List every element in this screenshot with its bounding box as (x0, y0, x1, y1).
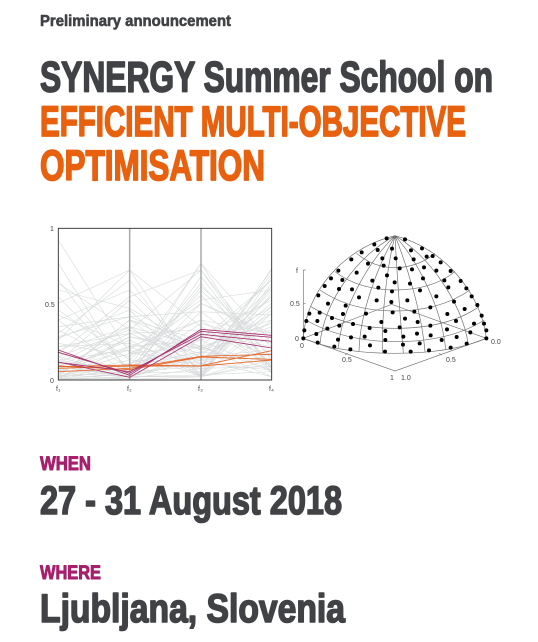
axes (130, 228, 201, 380)
chart: parallel coordinates: 0 (50, 378, 54, 385)
frame (58, 228, 272, 380)
title (40, 54, 493, 190)
date: 27 - 31 August 2018 (40, 479, 342, 523)
label: when: WHEN (40, 454, 91, 475)
chart: 3D sphere front: 0.5 (342, 357, 352, 364)
magenta lines (58, 329, 272, 377)
chart: 3D sphere front: 0.5 (446, 357, 456, 364)
text: preliminary announcement: Preliminary announcement (40, 13, 232, 30)
axes (303, 270, 486, 371)
grey solution lines (58, 240, 272, 379)
data points (301, 236, 488, 354)
chart: 3D sphere front: 1 (390, 375, 394, 382)
when section (40, 454, 342, 523)
chart: 3D sphere front: 0.0 (491, 339, 501, 346)
axis labels: 1 (50, 226, 54, 233)
label: where: WHERE (40, 563, 101, 584)
chart: 3D sphere front: 1.0 (401, 375, 411, 382)
sphere grid (303, 236, 486, 353)
chart: parallel coordinates: f₄ (269, 386, 274, 393)
chart: parallel coordinates: 0.5 (45, 302, 55, 309)
chart: 3D sphere front: 0 (295, 336, 299, 343)
chart: 3D sphere front: 0.5 (290, 301, 300, 308)
location: Ljubljana, Slovenia (40, 587, 346, 631)
axis labels: f (296, 268, 298, 275)
chart: parallel coordinates: f₁ (56, 386, 61, 393)
title line: OPTIMISATION: OPTIMISATION (40, 142, 265, 190)
orange lines (58, 351, 272, 372)
chart: parallel coordinates: f₃ (198, 386, 203, 393)
chart: parallel coordinates (45, 226, 274, 393)
chart: 3D sphere front: 0 (300, 343, 304, 350)
where section (40, 563, 346, 631)
chart: parallel coordinates: f₂ (127, 386, 132, 393)
chart: 3D sphere front (290, 236, 501, 382)
